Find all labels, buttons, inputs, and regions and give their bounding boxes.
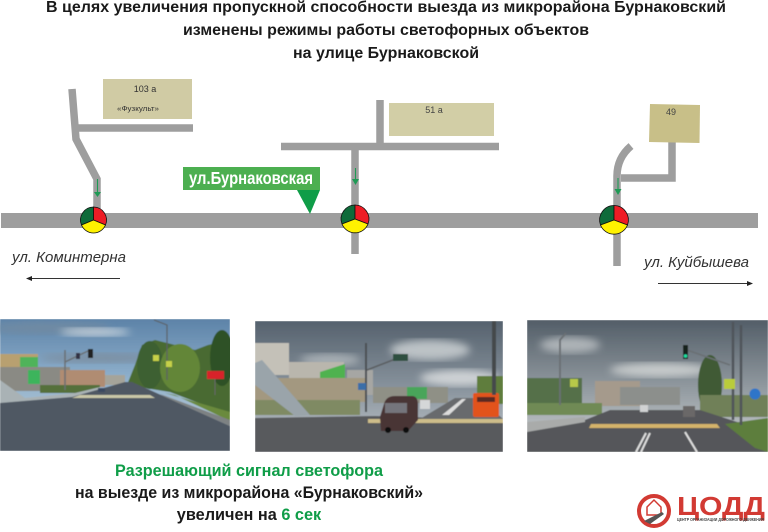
photo 3 xyxy=(527,320,768,452)
street label: ул. Бурнаковская: ул.Бурнаковская xyxy=(189,168,313,188)
title: на улице Бурнаковской xyxy=(293,45,479,62)
main road xyxy=(1,213,758,228)
building 51 a: 51 а xyxy=(425,105,443,115)
road scheme xyxy=(1,79,758,286)
green direction arrows xyxy=(94,168,622,197)
caption xyxy=(75,462,423,524)
title: изменены режимы работы светофорных объектов xyxy=(183,22,589,39)
photo 1 xyxy=(0,319,234,451)
street label: ул. Бурнаковская xyxy=(183,167,320,214)
caption: увеличен на 6 сек xyxy=(177,506,322,524)
logo emblem xyxy=(639,496,669,526)
traffic signal 1 xyxy=(80,207,107,233)
building 103 a xyxy=(103,79,192,119)
caption: на выезде из микрорайона «Бурнаковский» xyxy=(75,484,423,502)
building 103 a: «Фузкульт» xyxy=(117,104,159,113)
street name: ул. Куйбышева: ул. Куйбышева xyxy=(643,254,749,271)
logo: ЦОДД xyxy=(639,491,766,526)
traffic signal 2 xyxy=(341,205,369,233)
title xyxy=(46,0,726,62)
street name: ул. Коминтерна xyxy=(11,249,126,281)
side roads xyxy=(72,89,672,266)
street name: ул. Куйбышева xyxy=(643,254,753,286)
building 49 xyxy=(649,104,700,143)
photo 2 xyxy=(255,321,503,452)
caption: Разрешающий сигнал светофора xyxy=(115,462,384,480)
traffic signal 3 xyxy=(600,206,628,234)
building 51 a xyxy=(389,103,494,136)
street name: ул. Коминтерна: ул. Коминтерна xyxy=(11,249,126,266)
logo: ЦОДД: ЦОДД xyxy=(677,491,766,521)
building 103 a: 103 а xyxy=(134,84,156,94)
building 49: 49 xyxy=(666,107,676,117)
